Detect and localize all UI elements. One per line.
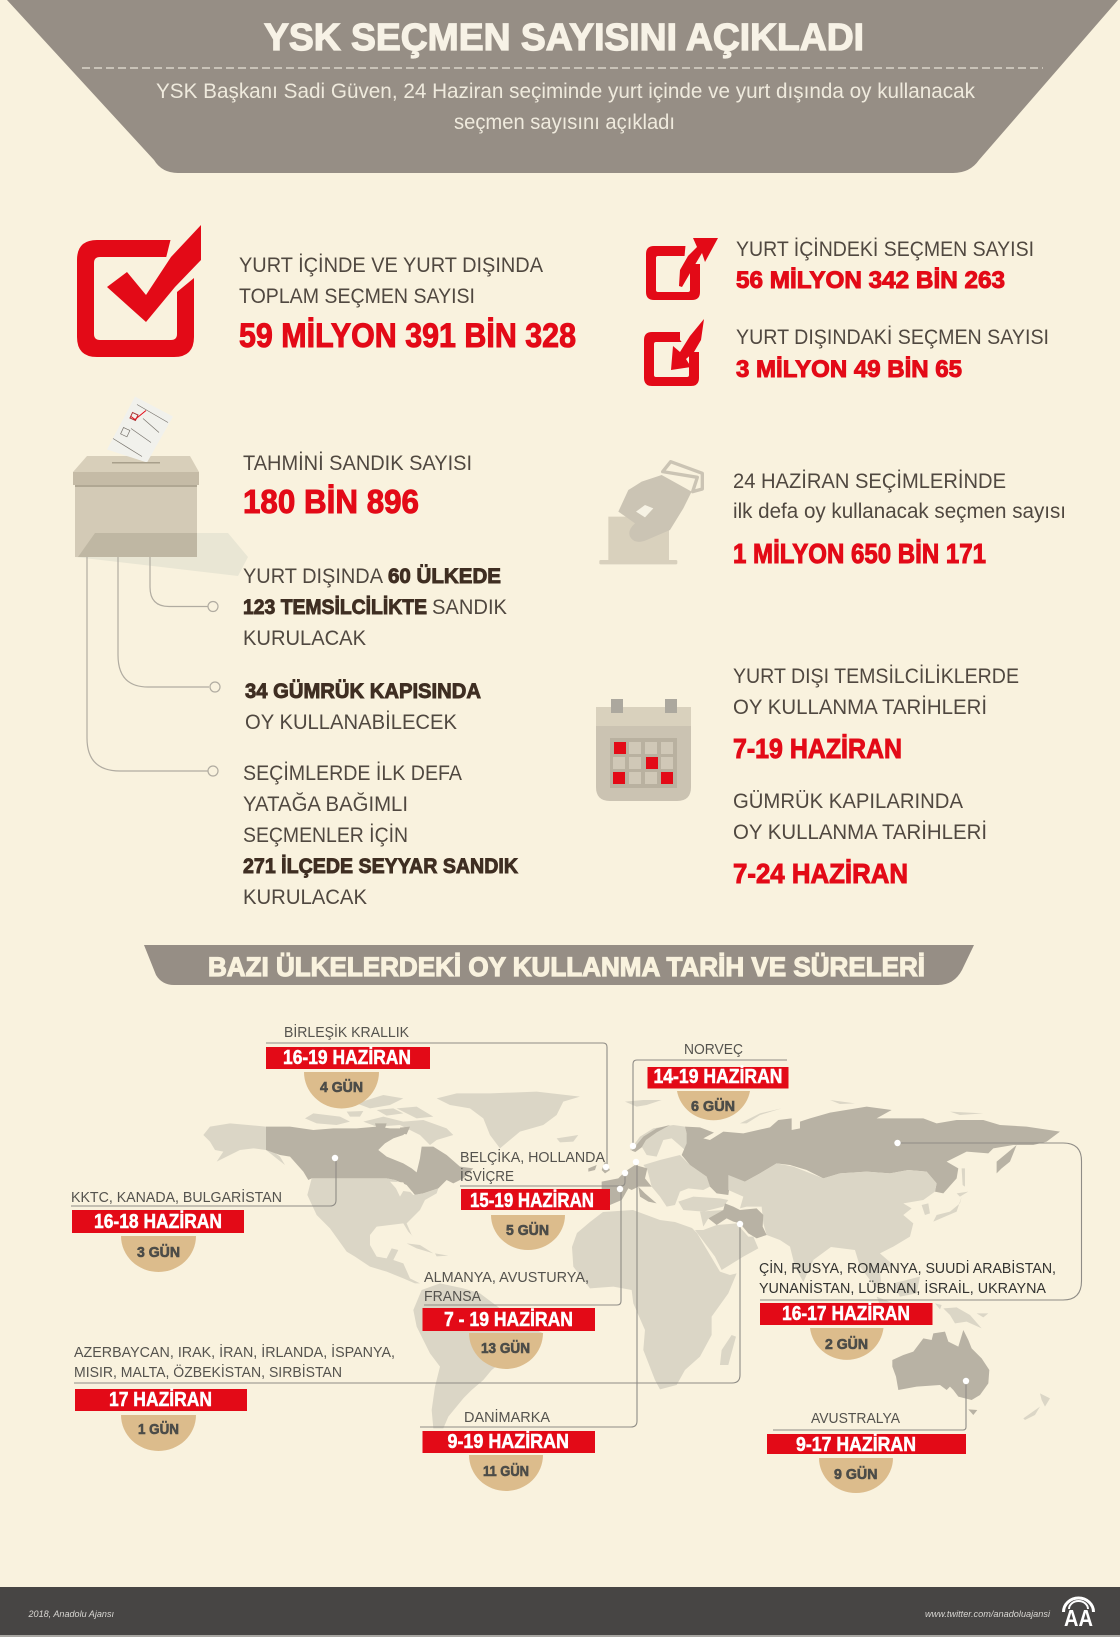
callout: China, Russia and others: 2 GÜN bbox=[825, 1336, 868, 1353]
text: mobile ballot boxes: YATAĞA BAĞIMLI bbox=[243, 791, 408, 816]
copyright: 2018, Anadolu Ajansı bbox=[28, 1609, 114, 1620]
callout: Belgium, Netherlands, Switzerland bbox=[460, 1148, 628, 1250]
callout: Denmark: 9-19 HAZİRAN bbox=[448, 1430, 569, 1453]
text: voting dates: GÜMRÜK KAPILARINDA bbox=[733, 789, 964, 813]
subtitle bbox=[156, 80, 975, 134]
callout: Germany, Austria, France: FRANSA bbox=[424, 1289, 481, 1305]
section heading banner: BAZI ÜLKELERDEKİ OY KULLANMA TARİH VE SÜRELERİ bbox=[208, 952, 925, 982]
twitter address: www.twitter.com/anadoluajansi bbox=[925, 1609, 1051, 1620]
callout: Azerbaijan, Iraq, Iran and others: MISIR, MALTA, ÖZBEKİSTAN, SIRBİSTAN bbox=[74, 1363, 342, 1381]
callout: Australia bbox=[767, 1378, 969, 1493]
text: customs gates bbox=[245, 678, 481, 734]
callout: Azerbaijan, Iraq, Iran and others: AZERBAYCAN, IRAK, İRAN, İRLANDA, İSPANYA, bbox=[74, 1343, 395, 1361]
callout: Australia: 9-17 HAZİRAN bbox=[796, 1433, 916, 1456]
text: voting dates: YURT DIŞI TEMSİLCİLİKLERDE bbox=[733, 664, 1019, 688]
footer bbox=[0, 1587, 1120, 1637]
callout: China, Russia and others: 16-17 HAZİRAN bbox=[782, 1302, 910, 1325]
text: total voters bbox=[239, 253, 576, 355]
text: 60 countries: 60 ÜLKEDE bbox=[388, 563, 501, 588]
text: first-time voters: ilk defa oy kullanacak seçmen sayısı bbox=[733, 499, 1066, 523]
callout: Australia: AVUSTRALYA bbox=[811, 1411, 900, 1427]
text: mobile ballot boxes bbox=[243, 761, 518, 909]
callout: TRNC, Canada, Bulgaria: 16-18 HAZİRAN bbox=[94, 1210, 222, 1233]
connectors from ballot box bbox=[87, 557, 220, 776]
text: voting dates: 7-24 HAZİRAN bbox=[733, 858, 908, 889]
header banner bbox=[7, 0, 1118, 173]
icon: calendar bbox=[596, 699, 691, 801]
callout: Belgium, Netherlands, Switzerland: BELÇİKA, HOLLANDA bbox=[460, 1148, 605, 1166]
text: voting dates: OY KULLANMA TARİHLERİ bbox=[733, 820, 987, 844]
icon: checkbox arrow up bbox=[646, 238, 718, 300]
callout: Denmark bbox=[420, 1159, 639, 1491]
callout: Germany, Austria, France: 7 - 19 HAZİRAN bbox=[444, 1308, 573, 1331]
text: estimated ballot boxes: 180 BİN 896 bbox=[243, 483, 419, 520]
text: total voters: YURT İÇİNDE VE YURT DIŞINDA bbox=[239, 253, 544, 277]
text: voting dates: OY KULLANMA TARİHLERİ bbox=[733, 695, 987, 719]
callout: Belgium, Netherlands, Switzerland: 5 GÜN bbox=[506, 1222, 549, 1239]
text: first-time voters: 24 HAZİRAN SEÇİMLERİNDE bbox=[733, 469, 1006, 493]
text: voting dates bbox=[733, 664, 1019, 889]
text: 60 countries: YURT DIŞINDA bbox=[243, 564, 384, 588]
ballot paper bbox=[107, 396, 173, 462]
icon: checkbox arrow down bbox=[644, 319, 704, 386]
text: 60 countries bbox=[243, 563, 508, 650]
callout: Germany, Austria, France: ALMANYA, AVUSTURYA, bbox=[424, 1270, 589, 1286]
icon: big red checkbox bbox=[77, 225, 206, 357]
callout: Denmark: 11 GÜN bbox=[483, 1463, 529, 1480]
text: total voters: TOPLAM SEÇMEN SAYISI bbox=[239, 284, 475, 308]
callout: TRNC, Canada, Bulgaria bbox=[71, 1155, 338, 1272]
text: mobile ballot boxes: KURULACAK bbox=[243, 885, 368, 909]
callout: Germany, Austria, France bbox=[422, 1186, 623, 1369]
callout: Norway: 6 GÜN bbox=[691, 1098, 735, 1115]
callout: United Kingdom: 16-19 HAZİRAN bbox=[283, 1046, 411, 1069]
callout: China, Russia and others: ÇİN, RUSYA, ROMANYA, SUUDİ ARABİSTAN, bbox=[759, 1259, 1056, 1277]
callout: United Kingdom: 4 GÜN bbox=[320, 1079, 363, 1096]
text: estimated ballot boxes: TAHMİNİ SANDIK SAYISI bbox=[243, 451, 472, 475]
callout: Azerbaijan, Iraq, Iran and others: 17 HAZİRAN bbox=[109, 1388, 212, 1411]
callout: United Kingdom bbox=[266, 1023, 609, 1170]
text: mobile ballot boxes: SEÇMENLER İÇİN bbox=[243, 823, 408, 847]
callout: Belgium, Netherlands, Switzerland: 15-19 HAZİRAN bbox=[470, 1189, 594, 1212]
callout: Norway bbox=[630, 1042, 788, 1149]
text: first-time voters: 1 MİLYON 650 BİN 171 bbox=[733, 538, 986, 569]
callout: Belgium, Netherlands, Switzerland: İSVİÇRE bbox=[460, 1167, 514, 1185]
text: estimated ballot boxes bbox=[243, 451, 472, 520]
text: total voters: 59 MİLYON 391 BİN 328 bbox=[239, 317, 576, 355]
title: YSK SEÇMEN SAYISINI AÇIKLADI bbox=[264, 17, 864, 59]
icon: ballot box bbox=[73, 396, 248, 576]
world map bbox=[203, 1092, 1060, 1428]
callout: Australia: 9 GÜN bbox=[834, 1466, 878, 1483]
text: 60 countries: KURULACAK bbox=[243, 626, 367, 650]
text: 60 countries: 123 TEMSİLCİLİKTE bbox=[243, 595, 427, 619]
callout: Norway: NORVEÇ bbox=[684, 1042, 743, 1058]
map: south america and africa bbox=[413, 1210, 737, 1428]
logo: AA: AA bbox=[1064, 1605, 1093, 1631]
callout: Azerbaijan, Iraq, Iran and others: 1 GÜN bbox=[138, 1421, 179, 1438]
text: domestic voters bbox=[736, 237, 1034, 294]
callout: TRNC, Canada, Bulgaria: KKTC, KANADA, BULGARİSTAN bbox=[71, 1188, 282, 1206]
text: domestic voters: 56 MİLYON 342 BİN 263 bbox=[736, 267, 1005, 294]
text: customs gates: OY KULLANABİLECEK bbox=[245, 710, 458, 734]
subtitle: seçmen sayısını açıkladı bbox=[454, 111, 675, 134]
text: 60 countries: SANDIK bbox=[432, 595, 508, 619]
map: north america bbox=[203, 1092, 580, 1283]
subtitle: YSK Başkanı Sadi Güven, 24 Haziran seçiminde yurt içinde ve yurt dışında oy kullanacak bbox=[156, 80, 975, 103]
map: oceania bbox=[892, 1303, 1050, 1420]
text: mobile ballot boxes: SEÇİMLERDE İLK DEFA bbox=[243, 761, 463, 785]
callout: Germany, Austria, France: 13 GÜN bbox=[481, 1340, 530, 1357]
text: overseas voters: 3 MİLYON 49 BİN 65 bbox=[736, 356, 962, 383]
callout: China, Russia and others bbox=[759, 1140, 1082, 1360]
callout: United Kingdom: BİRLEŞİK KRALLIK bbox=[284, 1023, 409, 1041]
text: domestic voters: YURT İÇİNDEKİ SEÇMEN SAYISI bbox=[736, 237, 1034, 261]
callout: Azerbaijan, Iraq, Iran and others bbox=[74, 1221, 743, 1451]
text: overseas voters bbox=[736, 325, 1049, 383]
callout: Denmark: DANİMARKA bbox=[464, 1408, 550, 1426]
map: eurasia bbox=[588, 1100, 1060, 1307]
callout: TRNC, Canada, Bulgaria: 3 GÜN bbox=[137, 1244, 180, 1261]
text: voting dates: 7-19 HAZİRAN bbox=[733, 733, 902, 764]
text: first-time voters bbox=[733, 469, 1066, 569]
text: overseas voters: YURT DIŞINDAKİ SEÇMEN SAYISI bbox=[736, 325, 1049, 349]
icon: hand casting vote bbox=[599, 462, 702, 564]
text: customs gates: 34 GÜMRÜK KAPISINDA bbox=[245, 678, 481, 703]
callout: Norway: 14-19 HAZİRAN bbox=[654, 1065, 782, 1088]
callout: China, Russia and others: YUNANİSTAN, LÜBNAN, İSRAİL, UKRAYNA bbox=[759, 1279, 1046, 1297]
text: mobile ballot boxes: 271 İLÇEDE SEYYAR SANDIK bbox=[243, 854, 518, 878]
section heading banner bbox=[144, 945, 974, 985]
